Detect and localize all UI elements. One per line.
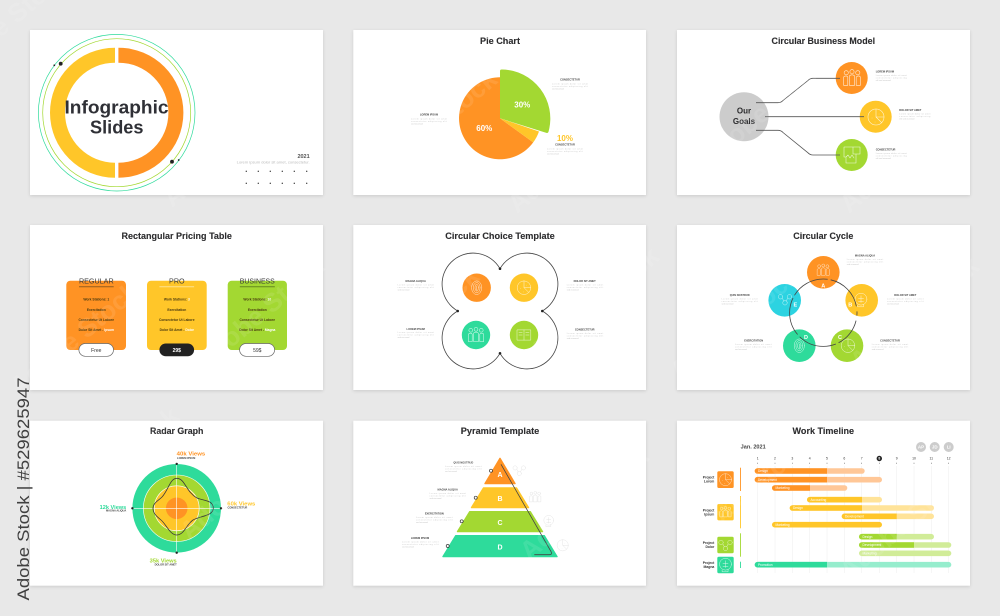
panel: circular choice template [353,225,646,390]
label: magna aliqua: consectetur adipiscing elit [398,286,434,289]
label: lorem ipsum: consectetur adipiscing elit [398,334,434,336]
avatars: AP [918,445,924,450]
panel: work timeline [677,421,970,586]
card: business: Exercitation [248,308,267,312]
label: dolor sit amet: consectetur adipiscing elit [567,286,604,289]
heading: Circular Business Model [772,36,875,47]
label: quis nostrud: consectetur adipiscing elit [722,300,758,303]
label: consectetur top: Lorem ipsum dolor sit amet [552,82,588,86]
step A [807,256,840,290]
label: consectetur: consectetur adipiscing elit [567,334,604,338]
label: lorem ipsum: Lorem ipsum dolor sit amet [402,540,439,544]
label: magna aliqua: MAGNA ALIQUA [855,254,875,258]
step C: C [838,335,842,341]
project: ipsum: Project [703,508,715,512]
label: lorem ipsum: consectetur adipiscing elit [402,543,439,546]
node: green [836,139,868,171]
label: dolor sit amet: DOLOR SIT AMET [574,279,596,283]
card: business [228,276,287,356]
label: quis nostrud: sed eiusmod [722,304,734,306]
text: Adobe Stock [834,93,975,219]
tier B: B [497,496,503,503]
card: pro: Consectetur Ut Labore [159,318,195,322]
label: consectetur top: sed eiusmod [552,88,565,90]
text: Adobe Stock [344,260,485,386]
value labels: 10% [557,134,573,143]
bar: design [790,505,934,511]
label: consectetur [567,328,604,340]
bar: development: Development [862,543,881,547]
label: consectetur: CONSECTETUR [575,328,595,332]
label: 40k views [177,452,205,460]
value labels: 30% [514,100,530,110]
month axis: 11 [930,457,933,461]
card: pro: Dolor Sit Amet - Dolor [160,328,195,332]
label: consectetur bottom: Lorem ipsum dolor sit amet [547,148,583,150]
month axis [757,456,951,464]
card: regular [66,276,126,356]
cover title: Slides [90,118,144,138]
month axis: 9 [896,457,898,461]
label: consectetur [872,339,909,351]
label: lorem ipsum: elit sed eiusmod [876,79,892,82]
label: lorem ipsum: LOREM IPSUM [876,70,894,74]
text: Adobe Stock [362,63,503,189]
label: lorem ipsum: sed eiusmod [398,337,410,339]
text: Adobe Stock [174,420,315,546]
label: dolor sit amet: Lorem ipsum dolor sit amet [887,298,924,300]
axis end dots [131,463,222,554]
choice: orange [462,274,491,302]
label: 40k views: 40k Views [177,452,205,458]
label: lorem ipsum: LOREM IPSUM [411,536,429,540]
label: quis nostrud: Lorem ipsum dolor sit amet [445,465,482,468]
label: lorem ipsum: Lorem ipsum dolor sit amet [876,74,907,77]
card: pro: Work Stations: 3 [164,298,190,302]
label: lorem ipsum: consectetur adipiscing elit [411,120,447,123]
label: consectetur: sed eiusmod [872,349,884,351]
choice: yellow [510,274,538,302]
label: magna aliqua: MAGNA ALIQUA [406,279,426,283]
text: Adobe Stock [157,87,298,213]
label: consectetur top: consectetur adipiscing elit [552,85,588,88]
label: consectetur: elit sed eiusmod [876,157,892,160]
step D [783,329,816,362]
card: regular: Dolor Sit Amet - Ipsum [79,328,114,332]
label: magna aliqua: sed eiusmod [398,290,410,292]
panel: pie chart [353,30,646,195]
label: 35k views: DOLOR SIT AMET [155,562,177,566]
text: Adobe Stock [524,240,665,366]
stock id caption, vertical: Adobe Stock | #529625947 [14,377,33,600]
label: lorem ipsum: LOREM IPSUM [420,112,438,116]
project: lorem [703,468,882,491]
heading: Work Timeline [793,426,854,437]
label: magna aliqua: Lorem ipsum dolor sit amet [847,258,884,261]
dot grid [246,171,307,184]
card: business: Dolor Sit Amet - Magna [239,328,276,332]
text: Adobe Stock [834,460,975,586]
label: consectetur [876,148,908,160]
project: dolor: Dolor [705,545,715,549]
card: pro: PRO [169,276,185,286]
project: dolor [703,533,951,557]
text: Adobe Stock [502,93,643,219]
grey icons [513,466,568,551]
bar: promotion: Promotion [758,563,773,567]
year and caption: 2021 [297,154,310,160]
text: Adobe Stock [4,275,145,401]
slice 10% [500,118,539,142]
label: lorem ipsum: LOREM IPSUM [407,327,425,331]
avatars [916,442,954,452]
label: dolor sit amet: consectetur adipiscing elit [887,300,924,303]
text: Adobe Stock [844,250,985,376]
label: magna aliqua: Lorem ipsum dolor sit amet [398,284,434,286]
label: 35k views: 35k Views [150,558,177,564]
donut: yellow half [50,48,115,178]
label: dolor sit amet: consectetur adipiscing [899,115,931,118]
card: pro: 29$ [173,348,181,354]
tier A: A [497,472,503,479]
label: 12k views: MAGNA ALIQUA [106,508,126,512]
bar: marketing: Marketing [862,552,877,556]
node: orange [836,62,868,94]
project: magna: Magna [704,565,714,569]
connectors [756,78,864,155]
bar: marketing: Marketing [776,523,790,527]
label: dolor sit amet: sed eiusmod [887,304,900,306]
month axis: 1 [757,457,759,461]
label: magna aliqua [430,488,466,500]
label: quis nostrud [445,460,482,473]
text: Adobe Stock [514,440,655,566]
step B: B [848,302,852,308]
label: exercitation: sed eiusmod [416,522,429,524]
label: consectetur: consectetur adipiscing elit [872,346,909,348]
label: exercitation: consectetur adipiscing elit [416,518,453,522]
choice: green [510,321,538,349]
label: dolor sit amet [567,279,604,292]
label: quis nostrud: sed eiusmod [445,471,458,473]
label: lorem ipsum [411,112,447,126]
month axis: 7 [861,457,863,461]
bar: development: Development [758,478,777,482]
month axis: 3 [791,457,793,461]
label: consectetur: CONSECTETUR [876,148,896,152]
label: exercitation [735,339,772,351]
panel: circular cycle [677,225,970,390]
month axis: 6 [843,457,845,461]
label: exercitation: Lorem ipsum dolor sit amet [735,343,772,346]
heading: Rectangular Pricing Table [121,231,232,242]
panel: rectangular pricing table [30,225,323,390]
bar: marketing [859,550,951,556]
label: lorem ipsum [402,536,439,548]
cover title: Infographic [64,98,168,118]
label: lorem ipsum: sed eiusmod [411,124,424,126]
step E: E [793,302,797,308]
label: magna aliqua: Lorem ipsum dolor sit amet [430,492,466,495]
label: consectetur bottom: sed eiusmod [547,154,560,156]
bar: development [842,514,934,519]
label: magna aliqua: MAGNA ALIQUA [438,488,458,492]
label: consectetur: sed eiusmod [567,338,579,340]
panel: infographic slides cover [30,30,323,195]
pyramid edge line [501,464,552,555]
label: quis nostrud [722,293,758,306]
heading: Pyramid Template [461,426,539,437]
card: regular: Consectetur Ut Labore [79,318,114,322]
slice 30% [500,69,550,133]
project: ipsum: Ipsum [704,512,714,516]
project: lorem: Project [703,476,715,480]
text: Adobe Stock [664,260,805,386]
bar: marketing: Marketing [776,486,790,490]
year and caption [237,154,310,164]
card: pro [147,276,207,356]
card: business: BUSINESS [240,276,275,286]
label: magna aliqua [398,279,434,292]
panel: circular business model [677,30,970,195]
radar rings [132,464,221,553]
panel: pyramid template [353,421,646,586]
card: business: Consectetur Ut Labore [240,318,275,322]
bar: design [755,468,865,474]
step D: D [804,335,808,341]
notch dots [456,267,544,355]
card: business: 59$ [253,348,262,354]
label: lorem ipsum: sed eiusmod [402,546,415,548]
label: lorem ipsum [876,70,908,82]
label: magna aliqua: sed eiusmod [847,264,859,266]
heading: Radar Graph [150,426,204,437]
label: lorem ipsum: Lorem ipsum dolor sit amet [411,118,447,120]
label: quis nostrud: consectetur adipiscing elit [445,468,482,470]
bar: design: Design [793,506,803,510]
step B [845,284,878,317]
value labels [476,100,573,143]
month axis: 4 [809,457,811,461]
step C [831,329,863,362]
label: consectetur: Lorem ipsum dolor sit amet [567,332,604,335]
label: quis nostrud: Lorem ipsum dolor sit amet [722,298,758,300]
label: dolor sit amet: DOLOR SIT AMET [894,293,917,297]
label: consectetur bottom: consectetur adipiscing elit [547,150,583,153]
label: lorem ipsum [398,327,434,339]
inner green ring [43,39,191,187]
clover outline [442,253,558,369]
month axis: 10 [912,457,916,461]
label: lorem ipsum: consectetur adipiscing [876,76,908,80]
label: exercitation: EXERCITATION [744,339,763,343]
project: magna [703,557,951,573]
label: magna aliqua: consectetur adipiscing elit [847,260,884,264]
label: consectetur top: CONSECTETUR [560,78,580,82]
bar: marketing [772,522,882,528]
month axis: 12 [947,457,951,461]
outer teal ring [38,34,195,191]
node: yellow [860,101,892,133]
heading: Pie Chart [480,36,521,47]
bar: development [859,542,951,548]
panel: radar graph [30,421,323,586]
project: ipsum [703,496,934,528]
card: regular: Free [91,348,102,354]
avatars: LI [947,445,951,450]
pyramid tiers [443,458,557,557]
bar: accounting: Accounting [810,498,826,502]
cycle ring [790,279,857,346]
step E [768,284,801,317]
center circle: our goals [720,92,768,141]
card: business: Work Stations: 10 [243,298,271,302]
label: quis nostrud: QUIS NOSTRUD [730,293,750,297]
bar: development [755,477,882,482]
month label: Jan. 2021 [741,445,766,451]
label: consectetur: CONSECTETUR [880,339,900,343]
label: 12k views: 12k Views [100,505,126,511]
card: regular: Exercitation [87,308,106,312]
value labels: 60% [476,124,492,133]
heading: Circular Choice Template [445,231,555,242]
text: Adobe Stock [364,420,505,546]
card: pro: Exercitation [167,308,186,312]
tier D: D [497,544,503,552]
orbit dots [53,62,180,164]
month axis: 8 [878,457,880,461]
label: dolor sit amet: elit sed eiusmod [899,118,915,120]
bar: design: Design [862,535,873,539]
label: exercitation: sed eiusmod [735,349,748,351]
text: Adobe Stock [44,400,185,526]
label: exercitation [416,512,453,524]
text: Adobe Stock [694,47,835,173]
label: consectetur bottom [547,143,583,156]
month axis: 5 [826,457,828,461]
data curve [153,478,213,535]
label: dolor sit amet [887,293,924,306]
label: quis nostrud: QUIS NOSTRUD [453,460,473,464]
label: dolor sit amet: Lorem ipsum dolor sit amet [567,284,604,286]
text: Adobe Stock [189,250,330,376]
label: lorem ipsum: Lorem ipsum dolor sit amet [398,331,434,334]
label: dolor sit amet: DOLOR SIT AMET [899,108,922,112]
cover title [64,98,168,138]
bar: design: Design [758,469,768,473]
label: dolor sit amet: Lorem ipsum dolor sit amet [899,112,931,116]
label: exercitation: EXERCITATION [425,512,444,516]
bar: marketing [772,485,847,491]
label: magna aliqua [847,254,884,266]
bar: development: Development [845,514,864,518]
tier C: C [497,520,503,527]
label: 40k views: LOREM IPSUM [177,456,195,460]
label: dolor sit amet [899,108,931,120]
card: regular: REGULAR [79,276,114,286]
avatars: JD [932,445,938,450]
label: magna aliqua: sed eiusmod [430,498,442,500]
label: exercitation: Lorem ipsum dolor sit amet [416,516,453,519]
label: consectetur bottom: CONSECTETUR [555,143,575,147]
grid lines [758,466,949,573]
project: lorem: Lorem [704,480,714,484]
label: consectetur: consectetur adipiscing [876,154,908,158]
card: regular: Work Stations: 1 [83,298,109,302]
text: Adobe Stock [674,430,815,556]
center circle: our goals: Goals [733,117,756,126]
month axis: 2 [774,457,776,461]
label: consectetur: Lorem ipsum dolor sit amet [872,343,909,346]
label: 60k views: CONSECTETUR [228,506,247,510]
bar: promotion [755,562,951,568]
heading: Circular Cycle [793,231,853,242]
project: magna: Project [703,561,715,565]
bar: accounting [807,497,882,503]
year and caption: Lorem ipsum dolor sit amet, consectetur. [237,160,310,164]
project: dolor: Project [703,541,715,545]
label: exercitation: consectetur adipiscing elit [735,346,772,348]
step A: A [821,284,825,290]
label: consectetur top [552,78,588,90]
donut: orange half [118,48,183,178]
bar: design [859,534,934,540]
label: consectetur: Lorem ipsum dolor sit amet [876,152,907,155]
center circle: our goals: Our [737,106,751,116]
label: magna aliqua: consectetur adipiscing elit [430,494,466,498]
choice: teal [462,321,490,349]
label: 60k views: 60k Views [227,502,255,508]
slice 60% [459,77,533,159]
label: dolor sit amet: sed eiusmod [567,290,579,292]
pins [446,469,492,548]
